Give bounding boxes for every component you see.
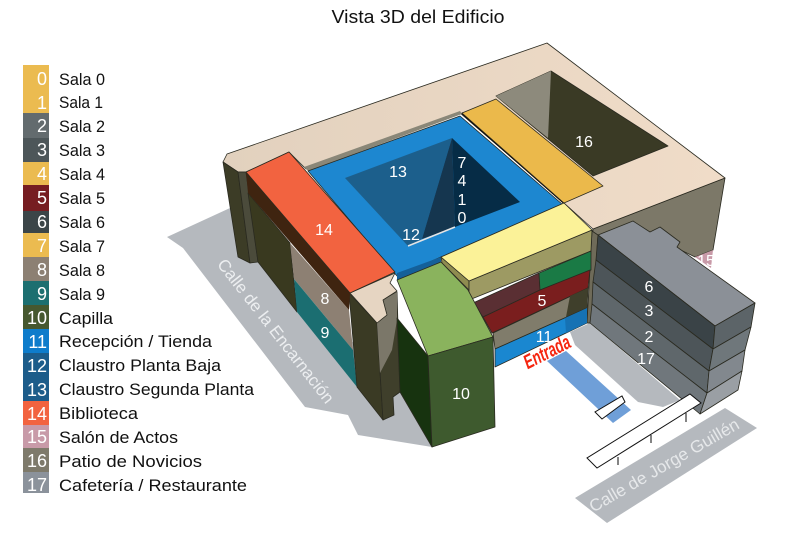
courtyard numbers [389, 155, 467, 244]
roof inner ledge [304, 111, 462, 171]
room 8: 8 [321, 291, 330, 308]
room 8 [290, 243, 353, 350]
entrance label: Entrada [520, 332, 575, 374]
cafeteria tower [590, 221, 755, 414]
courtyard numbers: 13 [389, 164, 407, 181]
legend labels [59, 70, 255, 495]
legend numbers: 15 [27, 427, 47, 447]
south-west corner walls [349, 292, 400, 420]
courtyard numbers: 0 [458, 210, 467, 227]
legend labels: Cafetería / Restaurante [59, 476, 247, 495]
walkway bridge [587, 394, 701, 468]
legend labels: Sala 3 [59, 141, 105, 160]
patio de novicios: 16 [575, 134, 593, 151]
courtyard numbers: 4 [458, 173, 467, 190]
room 9: 9 [321, 325, 330, 342]
tower numbers: 6 [645, 279, 654, 296]
legend labels: Sala 1 [59, 93, 103, 112]
pillar [587, 231, 598, 323]
chapel [397, 262, 495, 447]
orange roof strip [462, 99, 603, 203]
legend labels: Patio de Novicios [59, 452, 202, 471]
legend numbers [27, 69, 47, 495]
central block [441, 203, 592, 349]
legend labels: Sala 4 [59, 165, 105, 184]
central block: 5 [538, 293, 547, 310]
reception blue band [495, 308, 587, 367]
legend labels: Recepción / Tienda [59, 332, 213, 351]
entrance ramp [547, 351, 631, 423]
legend numbers: 8 [37, 260, 47, 280]
legend [23, 65, 255, 495]
legend numbers: 17 [27, 475, 47, 495]
legend numbers: 2 [37, 116, 47, 136]
legend labels: Sala 8 [59, 261, 105, 280]
legend numbers: 5 [37, 188, 47, 208]
street: Calle de la Encarnación [167, 208, 432, 447]
legend numbers: 1 [37, 93, 47, 113]
legend labels: Sala 6 [59, 213, 105, 232]
tower numbers: 17 [637, 351, 655, 368]
library roof: 14 [315, 222, 333, 239]
legend numbers: 12 [27, 356, 47, 376]
courtyard numbers: 1 [458, 192, 467, 209]
tower roof [598, 221, 755, 326]
legend labels: Sala 7 [59, 237, 105, 256]
entrance forecourt [570, 323, 680, 407]
legend numbers: 11 [28, 332, 47, 352]
legend labels: Salón de Actos [59, 428, 178, 447]
legend numbers: 7 [37, 236, 47, 256]
chapel: 10 [452, 386, 470, 403]
roof corner piece [350, 273, 397, 323]
legend numbers: 13 [27, 380, 47, 400]
legend labels: Sala 9 [59, 285, 105, 304]
title: Vista 3D del Edificio [332, 6, 504, 27]
room 9 [294, 279, 357, 387]
legend swatches [23, 65, 49, 493]
reception blue band: 11 [536, 329, 552, 346]
legend numbers: 16 [27, 451, 47, 471]
legend numbers: 10 [27, 308, 47, 328]
cloister second floor: blue walkway [308, 113, 564, 281]
cloister courtyard [345, 138, 520, 246]
west walls [223, 162, 297, 312]
courtyard numbers: 7 [458, 155, 467, 172]
street: Calle de la Encarnación: Calle de la Encarnación [213, 255, 338, 407]
legend labels: Claustro Segunda Planta [59, 380, 255, 399]
tower numbers: 3 [645, 303, 654, 320]
legend numbers: 14 [27, 404, 47, 424]
legend labels: Capilla [59, 309, 114, 328]
library roof [246, 152, 395, 310]
legend labels: Sala 5 [59, 189, 105, 208]
street: Calle de Jorge Guillén: Calle de Jorge Guillén [586, 415, 743, 516]
tower numbers: 2 [645, 329, 654, 346]
building roof [223, 43, 725, 229]
legend numbers: 9 [37, 284, 47, 304]
legend numbers: 0 [37, 69, 47, 89]
courtyard numbers: 12 [402, 227, 420, 244]
legend labels: Biblioteca [59, 404, 139, 423]
back wall [587, 178, 725, 323]
legend numbers: 4 [37, 164, 47, 184]
tower numbers [637, 279, 655, 368]
legend labels: Claustro Planta Baja [59, 356, 222, 375]
legend numbers: 3 [37, 140, 47, 160]
legend numbers: 6 [37, 212, 47, 232]
legend labels: Sala 0 [59, 70, 105, 89]
tower right faces [700, 303, 755, 414]
tower left faces [590, 235, 715, 414]
patio de novicios [496, 71, 668, 176]
legend labels: Sala 2 [59, 117, 105, 136]
room 15: Salón de Actos: 15 [697, 253, 715, 270]
